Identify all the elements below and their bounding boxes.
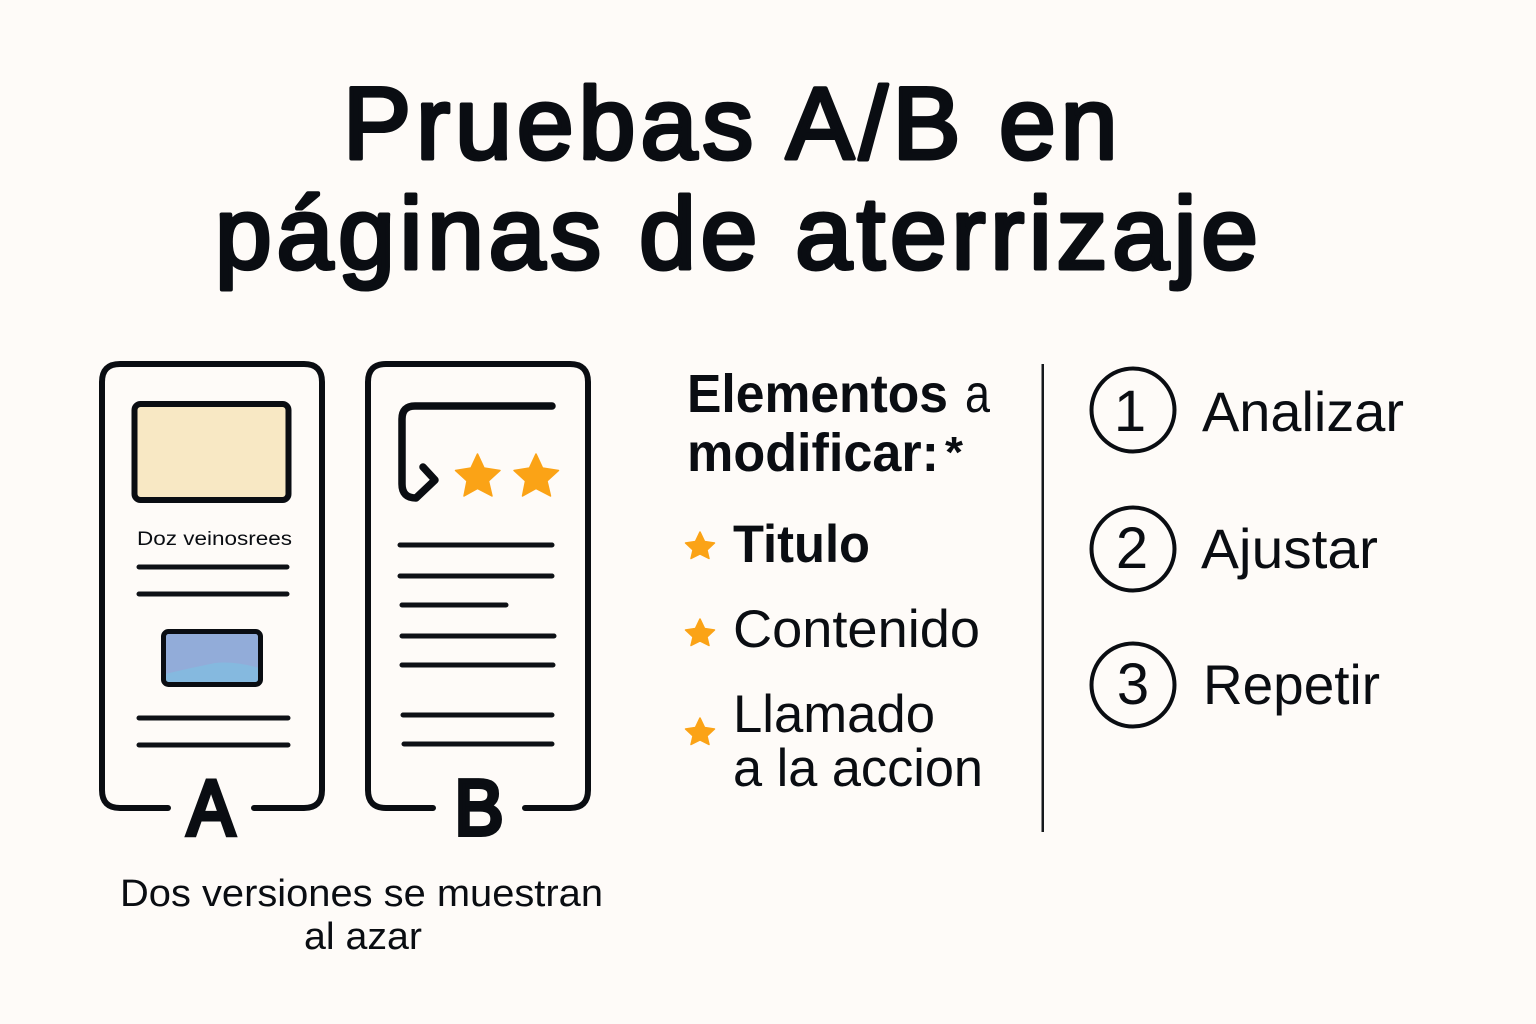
page frame A (102, 364, 322, 808)
icon: star (686, 718, 714, 744)
list item: Titulo: Titulo (733, 515, 870, 574)
number badge 3 (1092, 644, 1174, 726)
caption (120, 873, 603, 958)
number badge 3: 3 (1117, 652, 1149, 717)
number badge 1: 1 (1114, 379, 1146, 444)
list item: Llamado a la accion (686, 685, 983, 798)
elements heading: modificar: (687, 423, 939, 483)
panel: version A page (102, 364, 322, 852)
title: páginas de aterrizaje (215, 176, 1258, 290)
caption: Dos versiones se muestran (120, 873, 603, 915)
title: Pruebas A/B en (343, 66, 1118, 180)
headline hook shape B (402, 406, 552, 498)
label B: B (454, 764, 504, 852)
icon: star (686, 619, 714, 646)
step 1 (1092, 368, 1404, 452)
elements heading: a (965, 364, 991, 424)
step 2 (1092, 508, 1378, 590)
number badge 2: 2 (1116, 516, 1148, 581)
image placeholder A (134, 404, 288, 500)
step 3 (1092, 644, 1380, 726)
text lines B (400, 545, 554, 744)
elements heading: Elementos (687, 364, 948, 424)
panel: version B page (368, 364, 588, 852)
number badge 1 (1092, 368, 1174, 452)
text lines A upper (139, 567, 287, 594)
number badge 2 (1092, 508, 1174, 590)
list item: Llamado a la accion: Llamado (733, 685, 935, 744)
step 3: Repetir (1203, 653, 1380, 716)
step 2: Ajustar (1201, 517, 1378, 580)
elements heading: * (945, 428, 964, 477)
text lines A lower (139, 718, 288, 745)
list item: Llamado a la accion: a la accion (733, 739, 983, 798)
icon: star (686, 532, 714, 558)
step 1: Analizar (1202, 380, 1404, 443)
star ratings B (456, 454, 558, 496)
list item: Contenido: Contenido (733, 600, 980, 659)
elements heading (687, 364, 991, 483)
blue image A (164, 632, 260, 684)
divider line (1042, 364, 1044, 832)
title (215, 66, 1258, 290)
label A: A (188, 764, 234, 852)
caption: al azar (304, 916, 422, 958)
page frame B (368, 364, 588, 808)
small text A: Doz veinosrees (137, 528, 292, 550)
